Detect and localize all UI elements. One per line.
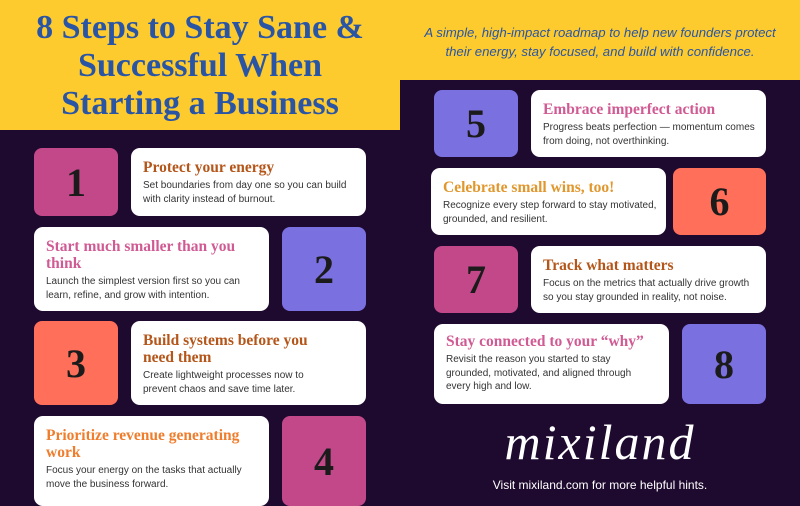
step 1 number bbox=[34, 148, 118, 216]
step 4 card: Focus your energy on the tasks that actually move the business forward. bbox=[46, 465, 242, 490]
title: 8 Steps to Stay Sane & bbox=[36, 9, 364, 46]
subtitle bbox=[424, 25, 776, 59]
step 2 card: Start much smaller than you think bbox=[46, 238, 235, 272]
step 4 card bbox=[34, 416, 269, 506]
step 6 card bbox=[431, 168, 666, 235]
step 6 card: Recognize every step forward to stay motivated, grounded, and resilient. bbox=[443, 200, 656, 224]
header: subtitle block bbox=[400, 0, 800, 80]
step 3 card bbox=[131, 321, 366, 405]
step 8 card bbox=[434, 324, 669, 404]
subtitle: A simple, high-impact roadmap to help new founders protect bbox=[424, 25, 776, 40]
step 6 card: Celebrate small wins, too! bbox=[443, 179, 614, 196]
step 8 card: Revisit the reason you started to stay grounded, motivated, and aligned through every high and low. bbox=[446, 354, 631, 392]
step 3 card: Create lightweight processes now to prevent chaos and save time later. bbox=[143, 370, 304, 394]
step 8 number bbox=[682, 324, 766, 404]
step 2 number: 2 bbox=[314, 246, 334, 292]
step 1 card bbox=[131, 148, 366, 216]
subtitle: their energy, stay focused, and build with confidence. bbox=[445, 44, 755, 59]
step 5 number: 5 bbox=[466, 101, 486, 146]
step 5 card: Embrace imperfect action bbox=[543, 101, 715, 118]
step 5 card: Progress beats perfection — momentum comes from doing, not overthinking. bbox=[543, 122, 755, 146]
step 5 number bbox=[434, 90, 518, 157]
step 6 number: 6 bbox=[710, 179, 730, 224]
step 3 number bbox=[34, 321, 118, 405]
step 4 number: 4 bbox=[314, 438, 334, 484]
header: title block bbox=[0, 0, 400, 130]
step 7 card bbox=[531, 246, 766, 313]
step 5 card bbox=[531, 90, 766, 157]
step 8 card: Stay connected to your “why” bbox=[446, 333, 644, 350]
step 3 number: 3 bbox=[66, 340, 86, 386]
step 1 card: Protect your energy bbox=[143, 159, 274, 176]
step 4 card: Prioritize revenue generating work bbox=[46, 427, 239, 461]
title: Starting a Business bbox=[61, 85, 339, 122]
step 8 number: 8 bbox=[714, 342, 734, 386]
step 7 card: Focus on the metrics that actually drive growth so you stay grounded in reality, not noise. bbox=[543, 278, 749, 302]
logo: mixiland: mixiland bbox=[504, 414, 695, 470]
step 2 card: Launch the simplest version first so you can learn, refine, and grow with intention. bbox=[46, 276, 240, 300]
step 7 card: Track what matters bbox=[543, 257, 674, 274]
title bbox=[36, 9, 364, 122]
step 3 card: Build systems before you need them bbox=[143, 332, 308, 366]
step 2 card bbox=[34, 227, 269, 311]
step 7 number bbox=[434, 246, 518, 313]
footer text: Visit mixiland.com for more helpful hints. bbox=[493, 478, 707, 492]
step 1 card: Set boundaries from day one so you can build with clarity instead of burnout. bbox=[143, 180, 346, 204]
step 7 number: 7 bbox=[466, 257, 486, 302]
step 6 number bbox=[673, 168, 766, 235]
title: Successful When bbox=[78, 47, 322, 84]
step 4 number bbox=[282, 416, 366, 506]
step 2 number bbox=[282, 227, 366, 311]
step 1 number: 1 bbox=[66, 160, 86, 204]
